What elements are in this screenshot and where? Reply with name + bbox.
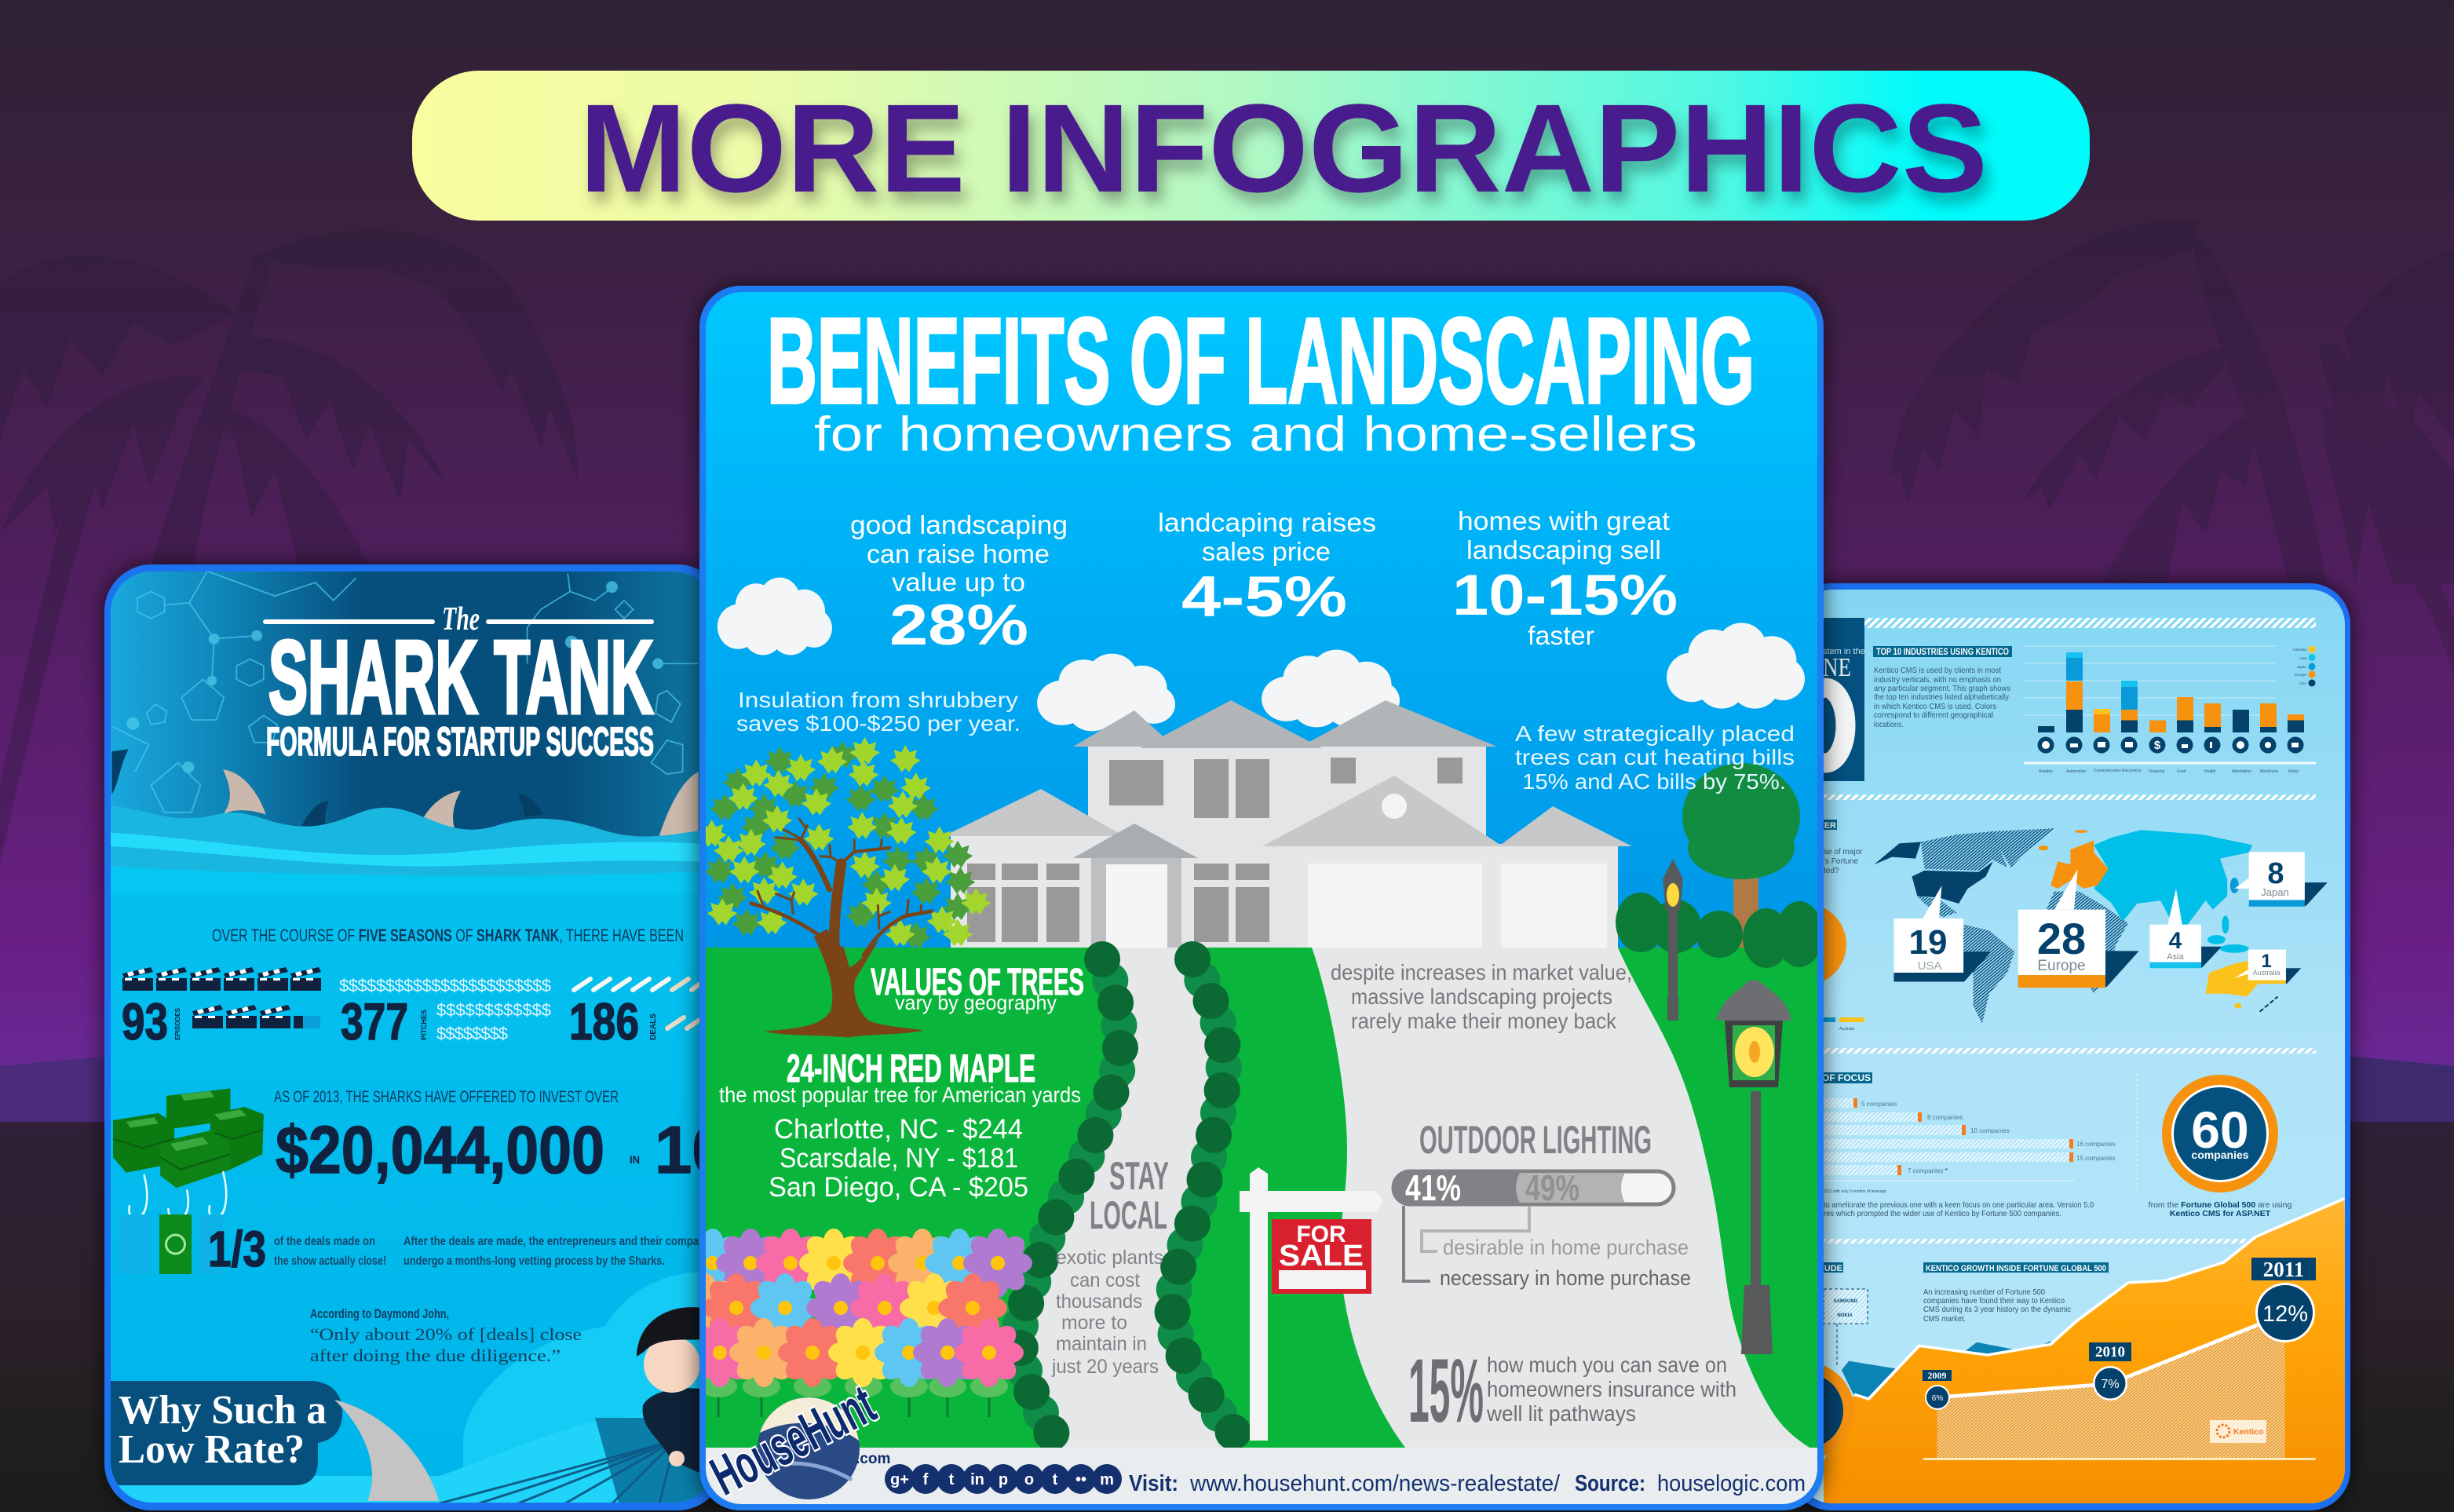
stat caption: from the Fortune Global 500 are using <box>2149 1200 2291 1210</box>
growth marker 2011 <box>2251 1258 2316 1342</box>
callout number Japan <box>2261 857 2289 898</box>
callout: Europe 28 <box>2018 869 2139 988</box>
insulation note: Insulation from shrubbery <box>738 688 1018 712</box>
stat: sales price 4-5%: sales price <box>1202 537 1331 566</box>
industries paragraph: correspond to different geographical <box>1874 710 1993 720</box>
growth marker 2011: 12% <box>2262 1302 2308 1327</box>
tree prices list: Scarsdale, NY - $181 <box>780 1143 1018 1174</box>
palm trees: left silhouette <box>0 230 577 864</box>
stat: sales price 4-5% <box>1158 508 1376 629</box>
chart legend: Japan <box>2297 665 2306 669</box>
industry labels: Retail <box>2288 769 2299 774</box>
callout number Japan: Japan <box>2261 886 2289 898</box>
heading: areas of focus: AS OF FOCUS <box>1806 1072 1871 1083</box>
social icons row: g+ <box>890 1471 909 1488</box>
horizontal bar chart: companies: 15 companies <box>2076 1155 2116 1162</box>
footer strip <box>706 1448 1817 1504</box>
Fortune 500 title block: NE <box>1823 653 1851 682</box>
tree prices list: San Diego, CA - $205 <box>769 1172 1028 1203</box>
growth marker 2009: 2009 <box>1928 1370 1947 1381</box>
heating note: trees can cut heating bills <box>1515 745 1795 769</box>
pathways text: homeowners insurance with <box>1487 1377 1736 1401</box>
lower water hills <box>111 1272 714 1507</box>
amount stat: IN <box>630 1153 640 1166</box>
for sale sign: FOR <box>1296 1222 1346 1247</box>
values of trees heading <box>871 962 1084 1014</box>
industry labels: Health <box>2204 769 2216 774</box>
growth marker 2009 <box>1923 1370 1952 1410</box>
flower bed <box>671 1229 1032 1417</box>
callout: USA 19 <box>1893 886 1991 981</box>
subtitle: for homeowners and home-sellers <box>814 407 1697 462</box>
large lamp post <box>1717 981 1791 1354</box>
centre panel contents: 15% <box>1408 1341 1484 1441</box>
panel: right Kentico infographic <box>1757 583 2354 1510</box>
stat: 186 deals <box>569 979 707 1050</box>
lighting progress bar: 49% <box>1525 1167 1579 1208</box>
callout number Asia: 4 <box>2169 928 2182 954</box>
outdoor lighting heading: OUTDOOR LIGHTING <box>1419 1118 1652 1162</box>
focus paragraph: res which prompted the wider use of Kentico by Fortune 500 companies. <box>1824 1209 2061 1218</box>
red maple heading: the most popular tree for American yards <box>719 1083 1081 1107</box>
social icons row: •• <box>1075 1471 1086 1488</box>
cropped map heading and intro: 's Fortune <box>1824 857 1859 866</box>
callout number Europe <box>2038 923 2085 973</box>
stat: 186 deals: 186 <box>569 992 639 1050</box>
background: dark ground <box>0 1122 2454 1512</box>
dotted divider <box>2136 1074 2138 1193</box>
driveway <box>1312 948 1817 1507</box>
right panel frame <box>1790 583 2350 1510</box>
invest line: AS OF 2013, THE SHARKS HAVE OFFERED TO INVEST OVER <box>274 1088 619 1106</box>
cropped map heading and intro: se of major <box>1824 848 1863 856</box>
stat: sell 10-15% faster: 10-15% <box>1452 564 1678 627</box>
industries paragraph: any particular segment. This graph shows <box>1874 684 2010 693</box>
logo: HouseHunt globe: .com <box>856 1451 890 1467</box>
horizontal bar chart: companies: 8 companies <box>1927 1114 1963 1121</box>
chart legend: Asia <box>2299 656 2306 660</box>
industry labels: Communication <box>2094 769 2121 773</box>
footer visit link: Visit: <box>1129 1471 1178 1496</box>
growth heading: KENTICO GROWTH INSIDE FORTUNE GLOBAL 500 <box>1926 1264 2106 1273</box>
map legend swatches <box>1824 1017 1864 1030</box>
subtitle: FORMULA FOR STARTUP SUCCESS <box>266 719 654 764</box>
vetting text: After the deals are made, the entrepreneurs and their compa <box>404 1235 699 1248</box>
industry labels <box>2039 769 2299 773</box>
callout number USA: 19 <box>1909 923 1947 962</box>
focus paragraph: to ameliorate the previous one with a keen focus on one particular area. Version 5.0 <box>1824 1200 2094 1210</box>
vetting text <box>404 1235 699 1268</box>
clients heading and logos <box>1819 1262 1868 1366</box>
footer visit link: www.househunt.com/news-realestate/ <box>1189 1471 1561 1496</box>
industries paragraph: in which Kentico CMS is used. Colors <box>1874 702 1996 711</box>
stat: sell 10-15% faster: faster <box>1528 621 1594 650</box>
clients heading and logos: LUDE <box>1819 1264 1842 1273</box>
stat: 377 pitches <box>339 976 551 1050</box>
stat: 377 pitches: $$$$$$$$ <box>436 1024 508 1043</box>
background: purple dusk gradient <box>0 0 2454 1123</box>
industries paragraph: locations. <box>1874 720 1904 729</box>
lighting progress bar <box>1392 1167 1674 1208</box>
market value note: rarely make their money back <box>1351 1009 1617 1033</box>
quote: “Only about 20% of [deals] close <box>310 1324 582 1344</box>
growth paragraph: CMS during its 3 year history on the dynamic <box>1923 1305 2071 1314</box>
left navy circle with orange ring <box>1757 1362 1854 1459</box>
house <box>944 700 1632 948</box>
panel: centre Benefits of Landscaping infographic <box>671 286 1824 1510</box>
waves <box>108 805 703 893</box>
lighting progress bar: 41% <box>1405 1167 1461 1208</box>
grey shark fin <box>334 1400 439 1501</box>
callout: Asia 4 <box>2149 889 2222 968</box>
quote <box>310 1306 582 1365</box>
exotic plants text: exotic plants <box>1056 1247 1163 1269</box>
amount stat: 10 <box>655 1113 729 1188</box>
growth marker 2010 <box>2089 1342 2131 1401</box>
stat circle: 60 companies: 60 <box>2191 1101 2249 1159</box>
horizontal bar chart: companies <box>1824 1098 2116 1194</box>
stat: 1/3: 1/3 <box>208 1221 266 1277</box>
exotic plants text <box>1051 1247 1163 1378</box>
red maple heading <box>719 1046 1081 1107</box>
stat: 93 episodes: EPISODES <box>174 1007 181 1040</box>
stay local heading: STAY <box>1109 1154 1169 1198</box>
red maple heading: 24-INCH RED MAPLE <box>787 1046 1035 1090</box>
stay local heading: LOCAL <box>1090 1193 1167 1237</box>
intro line: OVER THE COURSE OF FIVE SEASONS OF SHARK TANK, THERE HAVE BEEN <box>212 926 684 945</box>
social icons row: m <box>1100 1471 1114 1488</box>
exotic plants text: thousands <box>1056 1291 1142 1313</box>
world map <box>1874 828 2277 1024</box>
callout number Japan: 8 <box>2267 857 2284 890</box>
footer source credit: houselogic.com <box>1657 1471 1806 1496</box>
lighting legend <box>1404 1206 1691 1290</box>
insulation note <box>736 688 1021 736</box>
chart legend <box>2292 645 2316 686</box>
callout number Australia: 1 <box>2261 951 2272 972</box>
growth paragraph: companies have found their way to Kentico <box>1923 1296 2065 1306</box>
social icons row: in <box>970 1471 984 1488</box>
deals close text: of the deals made on <box>274 1235 375 1248</box>
horizontal bar chart: companies: 16 companies <box>2076 1141 2116 1148</box>
deals close text <box>274 1235 386 1268</box>
bushes <box>1616 893 1823 968</box>
exotic plants text: maintain in <box>1056 1333 1147 1355</box>
focus paragraph <box>1824 1200 2094 1218</box>
orange pie edge <box>1824 908 1846 981</box>
pathways text: well lit pathways <box>1486 1401 1636 1426</box>
callout number Australia: Australia <box>2252 969 2281 977</box>
stat: value up to 28%: value up to <box>892 568 1025 597</box>
centre panel frame <box>699 286 1824 1510</box>
title banner <box>412 71 2090 221</box>
social icons row: t <box>949 1471 955 1488</box>
horizontal bar chart: companies: 7 companies * <box>1908 1167 1948 1174</box>
background: ground shade left <box>0 1056 110 1122</box>
growth paragraph: An increasing number of Fortune 500 <box>1923 1287 2045 1297</box>
stat: sell 10-15% faster: landscaping sell <box>1466 535 1661 564</box>
quote: According to Daymond John, <box>310 1306 449 1321</box>
hooks <box>129 1173 226 1218</box>
stat: value up to 28%: can raise home <box>867 539 1050 568</box>
tree prices list: Charlotte, NC - $244 <box>774 1114 1023 1145</box>
maple tree <box>696 737 991 1038</box>
horizontal bar chart: companies: 2011 with only 3 months of leverage. <box>1824 1189 1887 1194</box>
stat circle: 60 companies <box>2162 1075 2278 1192</box>
sky <box>706 292 1817 951</box>
left panel contents <box>108 572 729 1507</box>
growth marker 2010: 2010 <box>2095 1344 2125 1360</box>
Kentico logo: Kentico <box>2233 1427 2264 1437</box>
right hedge <box>1173 959 1240 1438</box>
chart legend: Europe <box>2295 673 2306 677</box>
callout number Australia <box>2252 951 2281 977</box>
industries paragraph <box>1874 666 2010 729</box>
character: Daymond John <box>637 1307 707 1476</box>
for sale sign: SALE <box>1279 1240 1364 1273</box>
callout: why such a low rate: Low Rate? <box>119 1427 305 1472</box>
pathways text: how much you can save on <box>1487 1353 1727 1377</box>
callout number Europe: 28 <box>2037 914 2086 963</box>
social icons row: p <box>999 1471 1008 1488</box>
footer source credit: Source: <box>1575 1471 1645 1496</box>
stat: 186 deals: DEALS <box>649 1013 658 1040</box>
main title: SHARK TANK <box>268 619 653 735</box>
map legend swatches: Australia <box>1839 1027 1855 1032</box>
stat: 377 pitches: 377 <box>341 992 408 1050</box>
stat: value up to 28% <box>850 510 1068 657</box>
stat: sales price 4-5%: landcaping raises <box>1158 508 1376 537</box>
vetting text: undergo a months-long vetting process by the Sharks. <box>404 1255 665 1268</box>
Fortune 500 title block: stem in the <box>1823 647 1865 656</box>
values of trees heading: vary by geography <box>895 991 1057 1014</box>
left hedge <box>1020 959 1120 1437</box>
cropped map heading and intro: ted? <box>1824 867 1839 875</box>
left panel frame <box>104 564 725 1510</box>
Fortune 500 title block <box>1824 618 1865 781</box>
exotic plants text: more to <box>1061 1312 1127 1334</box>
stat: sell 10-15% faster <box>1452 506 1678 650</box>
callout: Japan 8 <box>2234 852 2328 907</box>
social icons row: f <box>923 1471 929 1488</box>
growth paragraph: CMS market. <box>1923 1314 1966 1324</box>
chart legend: USA <box>2299 681 2306 685</box>
industry labels: Aviation <box>2039 769 2053 774</box>
stat: sell 10-15% faster: homes with great <box>1458 506 1670 535</box>
callout number Asia: Asia <box>2167 952 2185 962</box>
centre panel contents <box>671 292 1823 1507</box>
industry icons row <box>2038 736 2303 754</box>
bill icons: one third <box>119 1214 223 1274</box>
industry labels: Electronics <box>2122 769 2142 773</box>
social icons row <box>885 1464 1122 1494</box>
values of trees heading: VALUES OF TREES <box>871 962 1084 1003</box>
shark fins <box>111 749 699 837</box>
garden path <box>1020 948 1244 1452</box>
callout: why such a low rate <box>111 1381 342 1485</box>
stat caption: Kentico CMS for ASP.NET <box>2170 1209 2271 1218</box>
clouds <box>718 578 1805 731</box>
cropped map heading and intro: TER <box>1819 821 1836 831</box>
stat: 377 pitches: $$$$$$$$$$$$ <box>436 1000 551 1020</box>
amount stat: $20,044,000 <box>276 1113 604 1188</box>
growth paragraph <box>1923 1287 2071 1324</box>
heating note <box>1515 721 1795 794</box>
chart legend: Australia <box>2292 648 2306 652</box>
Kentico logo <box>2210 1420 2266 1443</box>
for sale sign <box>1240 1167 1383 1441</box>
exotic plants text: can cost <box>1070 1269 1140 1291</box>
industries paragraph: industry verticals, with no emphasis on <box>1874 675 2001 685</box>
market value note <box>1331 960 1632 1033</box>
stat: value up to 28%: 28% <box>889 593 1028 657</box>
lighting legend: necessary in home purchase <box>1440 1266 1691 1290</box>
quote: after doing the due diligence.” <box>310 1346 561 1365</box>
"The" script word: The <box>442 601 480 637</box>
tree prices list <box>769 1114 1028 1203</box>
social icons row: t <box>1053 1471 1058 1488</box>
growth marker 2010: 7% <box>2101 1378 2120 1391</box>
industries paragraph: Kentico CMS is used by clients in most <box>1874 666 2001 675</box>
industry icons row: $ <box>2154 739 2161 752</box>
lighting legend: desirable in home purchase <box>1443 1236 1689 1259</box>
pathways text <box>1486 1353 1736 1426</box>
industry labels: Financial <box>2149 769 2164 774</box>
stat: sales price 4-5%: 4-5% <box>1181 565 1347 629</box>
industry labels: Information <box>2232 769 2251 774</box>
main title: BENEFITS OF LANDSCAPING <box>767 293 1755 429</box>
heating note: A few strategically placed <box>1515 721 1795 746</box>
stay local heading <box>1090 1154 1169 1237</box>
industry labels: Machinery <box>2260 769 2279 774</box>
stat circle: 60 companies: companies <box>2191 1149 2249 1161</box>
logo: HouseHunt globe: HouseHunt <box>701 1373 885 1507</box>
logo: HouseHunt globe <box>701 1373 890 1507</box>
clients heading and logos: NOKIA <box>1837 1313 1853 1318</box>
stat: 377 pitches: PITCHES <box>420 1010 428 1040</box>
stat: 93 episodes: 93 <box>122 992 168 1050</box>
net and boat <box>440 1418 707 1507</box>
market value note: despite increases in market value, <box>1331 960 1632 984</box>
hexagon network decoration <box>113 572 699 813</box>
clients heading and logos: SAMSUNG <box>1834 1299 1858 1304</box>
deals close text: the show actually close! <box>274 1255 386 1268</box>
callout number USA <box>1911 929 1946 970</box>
callout: Australia 1 <box>2234 950 2301 984</box>
cropped map heading and intro <box>1824 820 1862 873</box>
title rule <box>263 619 654 624</box>
heating note: 15% and AC bills by 75%. <box>1522 769 1786 794</box>
social icons row: o <box>1024 1471 1034 1488</box>
footer source credit <box>1575 1471 1806 1496</box>
stat caption <box>2149 1200 2291 1218</box>
growth marker 2011: 2011 <box>2263 1258 2304 1281</box>
money stack icon <box>113 1089 264 1188</box>
industries paragraph: the top ten industries listed alphabetically <box>1874 692 2010 702</box>
growth marker 2009: 6% <box>1932 1394 1943 1403</box>
industry labels: Food <box>2177 769 2186 774</box>
stacked bar chart: industries <box>2024 646 2316 765</box>
callout number Europe: Europe <box>2037 958 2086 974</box>
horizontal bar chart: companies: 10 companies <box>1970 1127 2010 1134</box>
industries heading: TOP 10 INDUSTRIES USING KENTICO <box>1876 646 2009 657</box>
callout number Asia <box>2167 928 2185 962</box>
stat: 377 pitches: $$$$$$$$$$$$$$$$$$$$$$$ <box>339 976 551 995</box>
exotic plants text: just 20 years <box>1051 1356 1159 1378</box>
background: ground shade right <box>2347 1056 2454 1122</box>
panel: left Shark Tank infographic <box>104 564 729 1510</box>
background tree <box>1682 763 1800 958</box>
banner pill <box>412 71 2090 221</box>
industry labels: Automotive <box>2066 769 2086 774</box>
palm trees: right silhouette <box>1891 219 2454 675</box>
market value note: massive landscaping projects <box>1351 984 1612 1009</box>
callout: why such a low rate: Why Such a <box>119 1388 327 1433</box>
growth chart: orange area <box>1824 1199 2354 1510</box>
right panel contents <box>1813 590 2345 1503</box>
blue peaks behind growth chart <box>1842 1342 2050 1399</box>
lawn <box>706 948 1817 1458</box>
small lamp post <box>1663 859 1683 1021</box>
banner title text: MORE INFOGRAPHICS <box>579 78 1988 218</box>
horizontal bar chart: companies: 5 companies <box>1861 1101 1897 1108</box>
callout number USA: USA <box>1918 959 1941 973</box>
stat: 93 episodes <box>122 967 321 1050</box>
stat: value up to 28%: good landscaping <box>850 510 1068 539</box>
insulation note: saves $100-$250 per year. <box>736 711 1021 736</box>
